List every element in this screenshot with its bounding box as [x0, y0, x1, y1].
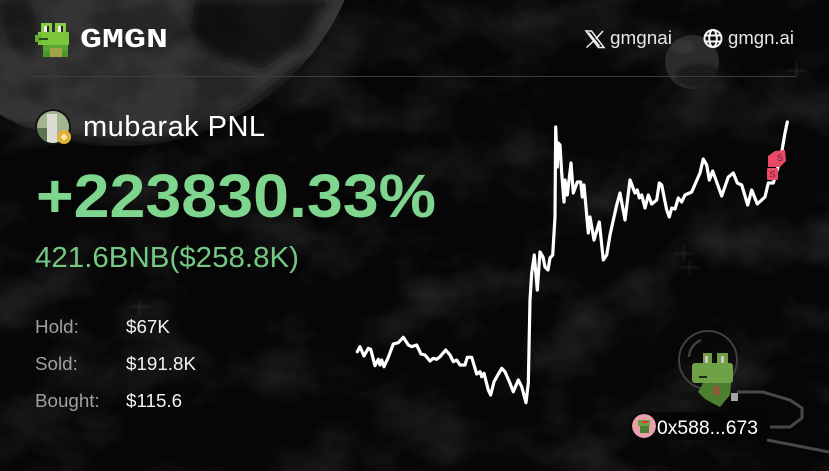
PNL percentage: +223830.33% [36, 162, 436, 230]
sold row: Sold: [35, 353, 78, 374]
moon: large planet [0, 0, 345, 146]
stats list [35, 316, 196, 411]
header logo [35, 23, 168, 57]
icon: wallet avatar [632, 414, 656, 438]
bought row [35, 390, 182, 411]
wallet address: 0x588...673 [657, 418, 758, 439]
hold row [35, 316, 170, 337]
logo wordmark: GMGN [80, 26, 168, 56]
token title [35, 109, 265, 145]
icon: X [586, 31, 604, 48]
sold row [35, 353, 196, 374]
marker: sell lower: S [769, 170, 776, 180]
icon: token avatar [35, 109, 71, 145]
icon: globe [704, 30, 722, 47]
token name: mubarak PNL [83, 111, 265, 143]
hold row: $67K [126, 316, 170, 337]
price line chart [357, 122, 787, 403]
icon: astronaut frog [679, 331, 829, 452]
sell markers [767, 150, 786, 180]
bought row: Bought: [35, 390, 100, 411]
text: gmgnai: gmgnai [610, 28, 672, 48]
hold row: Hold: [35, 316, 79, 337]
text: gmgn.ai: gmgn.ai [728, 28, 794, 48]
moon: small planet [665, 35, 724, 89]
profit amount: 421.6BNB($258.8K) [35, 242, 299, 274]
icon: GMGN frog [35, 23, 69, 57]
bought row: $115.6 [126, 390, 182, 411]
header links [586, 28, 794, 48]
sold row: $191.8K [126, 353, 196, 374]
marker: sell upper: S [777, 153, 783, 163]
wallet pill [631, 412, 769, 440]
